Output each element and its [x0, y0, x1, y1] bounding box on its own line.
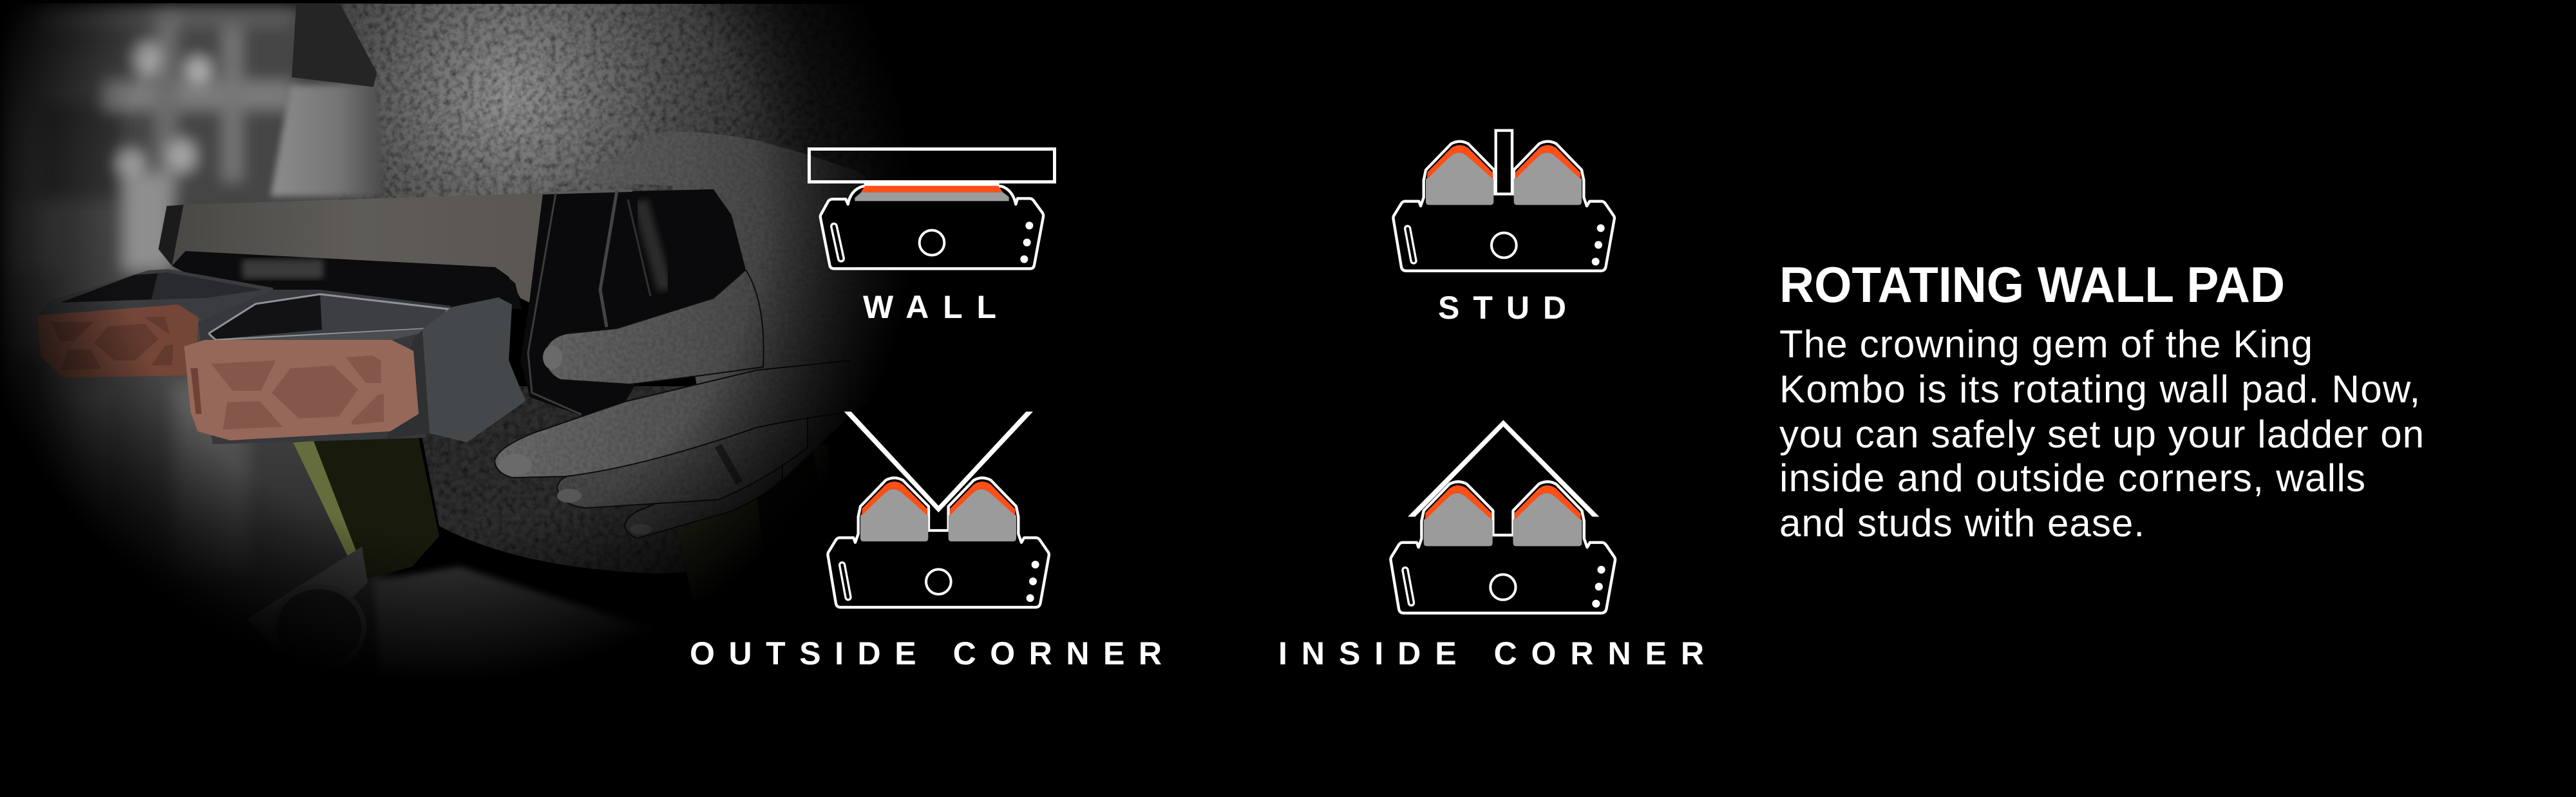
arm and sleeve [270, 84, 384, 196]
bar end cap [158, 205, 184, 266]
description text: Kombo is its rotating wall pad. Now, [1779, 368, 2420, 411]
orange pad surface [861, 186, 1003, 192]
olive ladder rails [293, 438, 439, 579]
right gray pad [949, 489, 1016, 541]
dots [1020, 221, 1033, 263]
icon: wall position [809, 149, 1055, 268]
ladder top bar [172, 193, 543, 303]
slot [1405, 570, 1411, 603]
left gray pad [1424, 493, 1493, 546]
dots [1027, 561, 1039, 602]
icon: outside corner position [828, 411, 1049, 607]
description text: and studs with ease. [1779, 502, 2145, 545]
description text [1779, 323, 2424, 545]
fingers [495, 270, 850, 538]
lower shirt belly [412, 386, 799, 574]
gap under bar [172, 251, 522, 309]
right orange pad [1515, 145, 1580, 179]
pivot circle [1490, 574, 1516, 600]
label: inside corner: INSIDE CORNER [1278, 635, 1704, 671]
corner lines [844, 411, 1033, 512]
label: stud: STUD [1438, 290, 1566, 326]
back pad [37, 305, 198, 378]
photo: hand holding ladder wall pad [0, 0, 966, 797]
label: wall: WALL [863, 289, 996, 325]
pivot circle [926, 569, 951, 594]
left orange pad [1425, 485, 1492, 520]
label: outside corner: OUTSIDE CORNER [690, 635, 1162, 671]
icon: stud position [1393, 131, 1615, 271]
front cup [198, 290, 526, 444]
left orange pad [862, 482, 927, 516]
ring [718, 445, 739, 483]
black bracket [520, 189, 746, 416]
right orange pad [950, 482, 1015, 516]
pad body [1390, 482, 1615, 613]
slot [842, 565, 848, 597]
dots [1592, 566, 1605, 608]
back cup [37, 269, 273, 330]
right gray pad [1514, 153, 1582, 205]
slot [834, 227, 841, 259]
pad body [820, 186, 1043, 268]
heading: ROTATING WALL PAD [1779, 256, 2285, 313]
left gray pad [860, 489, 928, 541]
right orange pad [1514, 485, 1581, 520]
icon: inside corner position [1390, 420, 1615, 613]
blurred workshop backdrop [0, 4, 386, 712]
right gray pad [1513, 493, 1582, 546]
description text: inside and outside corners, walls [1779, 456, 2365, 500]
wall outline [809, 149, 1055, 182]
finger nails [498, 345, 652, 534]
description text: The crowning gem of the King [1779, 323, 2313, 366]
backdrop falloff [0, 399, 412, 695]
pivot circle [1492, 233, 1517, 258]
gray pad [855, 192, 1009, 201]
description text: you can safely set up your ladder on [1779, 413, 2424, 456]
hand: palm [670, 131, 914, 480]
pad body [1393, 142, 1615, 271]
white contact strip [864, 183, 999, 186]
left orange pad [1427, 145, 1493, 179]
slot [1408, 229, 1414, 261]
pivot circle [920, 230, 944, 255]
ladder foot [247, 547, 368, 659]
left gray pad [1426, 153, 1493, 205]
thumb [590, 131, 792, 270]
vignette [0, 0, 914, 682]
corner lines [1408, 420, 1599, 517]
stud [1496, 131, 1512, 194]
pad body [828, 478, 1049, 607]
dots [1592, 224, 1605, 265]
front pad with hexagon pattern [184, 340, 419, 440]
shirt [339, 4, 919, 210]
